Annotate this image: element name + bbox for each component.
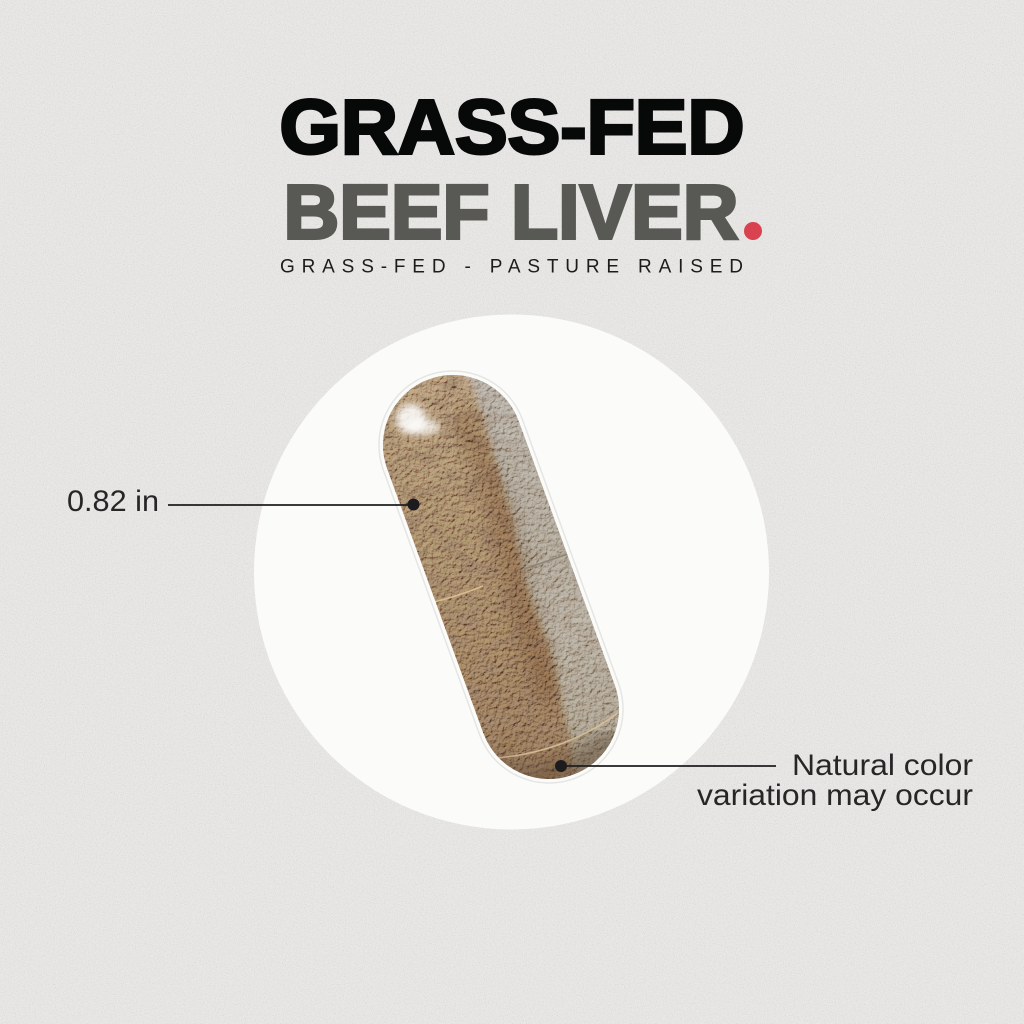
leader line [561, 765, 776, 767]
glossy highlight [396, 404, 440, 435]
title [280, 84, 762, 278]
shell seam lines [434, 586, 483, 602]
marker dot [408, 498, 420, 510]
callout: natural color: variation may occur [697, 779, 973, 812]
label: 0.82 in [67, 485, 159, 518]
translucent shell [467, 376, 619, 775]
crumb surface texture [383, 375, 619, 779]
capsule [378, 370, 624, 784]
callout: natural color [555, 749, 973, 812]
marker dot [555, 760, 567, 772]
powder patches [384, 375, 566, 778]
label: Natural color [792, 749, 973, 782]
capsule body [382, 375, 620, 779]
powder fill [383, 375, 574, 779]
white circle backdrop [254, 314, 769, 830]
darker powder core [462, 410, 552, 700]
heading line: BEEF LIVER: BEEF LIVER [284, 170, 738, 256]
subtitle: GRASS-FED - PASTURE RAISED [280, 256, 743, 278]
capsule outline halo [358, 350, 644, 804]
heading line: GRASS-FED: GRASS-FED [280, 84, 744, 170]
callout: 0.82 in [67, 485, 420, 518]
red period dot [744, 222, 762, 240]
capsule bottom shade [470, 735, 620, 777]
leader line [168, 504, 413, 506]
